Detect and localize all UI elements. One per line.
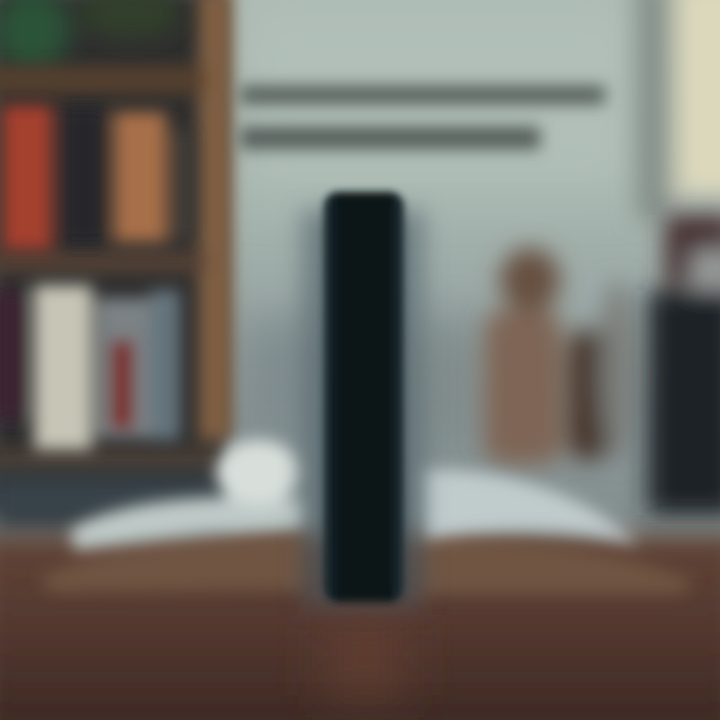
smart speaker xyxy=(302,192,424,605)
upper row of books xyxy=(2,105,192,250)
bookshelf xyxy=(0,0,232,534)
open book xyxy=(40,440,695,594)
figurine xyxy=(484,248,636,465)
book right pages xyxy=(422,469,640,545)
book underside xyxy=(40,530,695,594)
book left pages xyxy=(70,440,305,550)
wooden table xyxy=(0,535,720,720)
plant xyxy=(0,0,180,70)
shelf posts and boards xyxy=(0,0,232,472)
lower row of books xyxy=(0,285,180,450)
dark object on right xyxy=(648,215,720,515)
blurred wall headline xyxy=(240,86,605,149)
bright window xyxy=(636,0,720,220)
